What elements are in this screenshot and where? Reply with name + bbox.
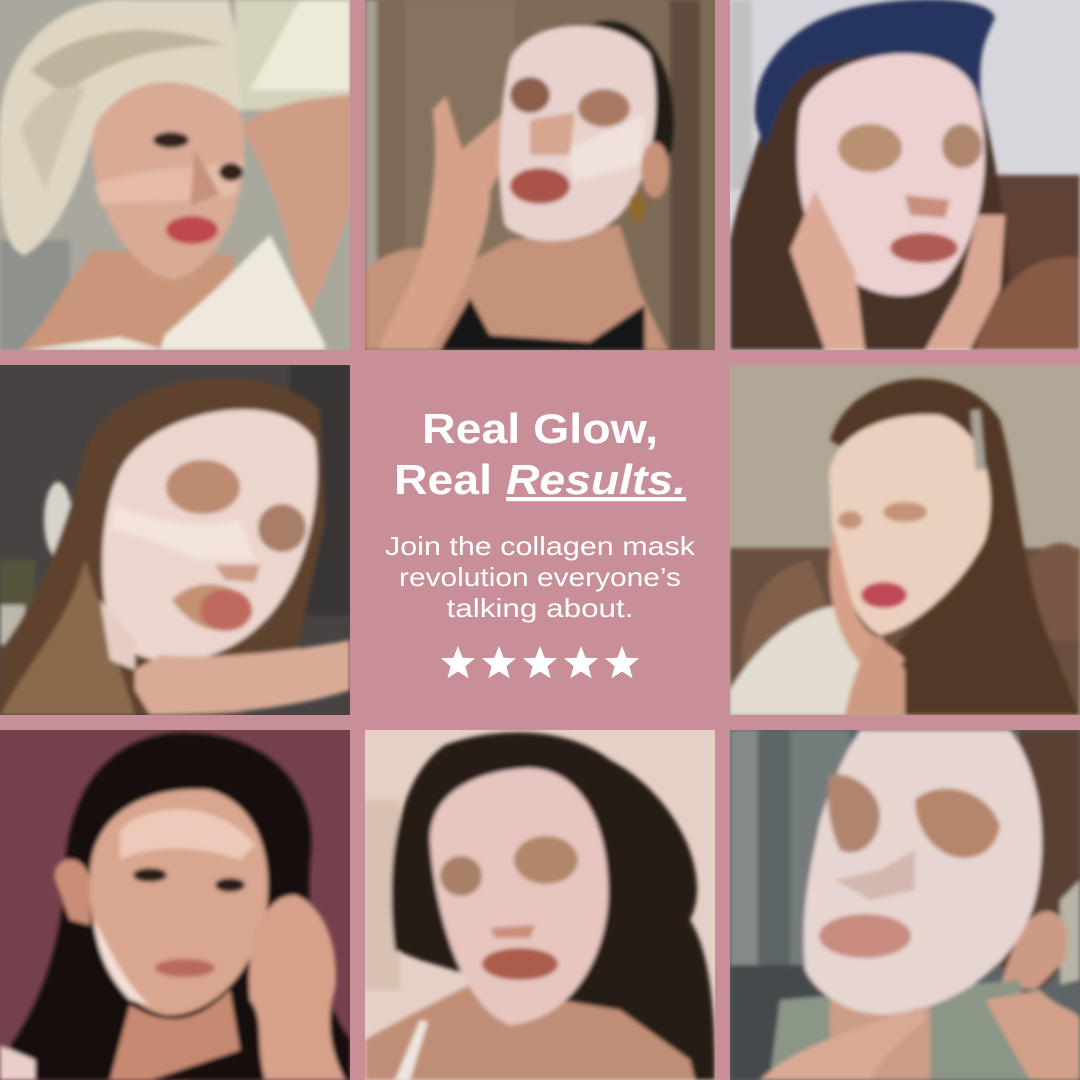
heading: Results. (506, 456, 686, 503)
photo: woman with dark hair and clear mask (0, 730, 350, 1080)
icon: five stars rating (441, 646, 639, 678)
panel: headline and stars (350, 350, 730, 730)
text block: tagline: revolution everyone’s (399, 562, 681, 592)
photo: woman lying on pillow with dark wavy hair (365, 730, 715, 1080)
text block: tagline (385, 531, 696, 623)
photo: close-up woman in mask touching chin (730, 730, 1080, 1080)
heading: Real Glow, (422, 405, 658, 452)
heading (394, 405, 686, 503)
photo: woman with closed eyes on sofa (730, 365, 1080, 715)
photo: woman with long hair blowing a kiss (0, 365, 350, 715)
photo: woman with towel wrap and clear mask (0, 0, 350, 350)
text block: tagline: Join the collagen mask (385, 531, 696, 561)
photo: woman touching collagen mask by wooden door (365, 0, 715, 350)
photo: woman with blue headband and pink mask (730, 0, 1080, 350)
heading: Real (394, 456, 492, 503)
text block: tagline: talking about. (446, 593, 634, 623)
